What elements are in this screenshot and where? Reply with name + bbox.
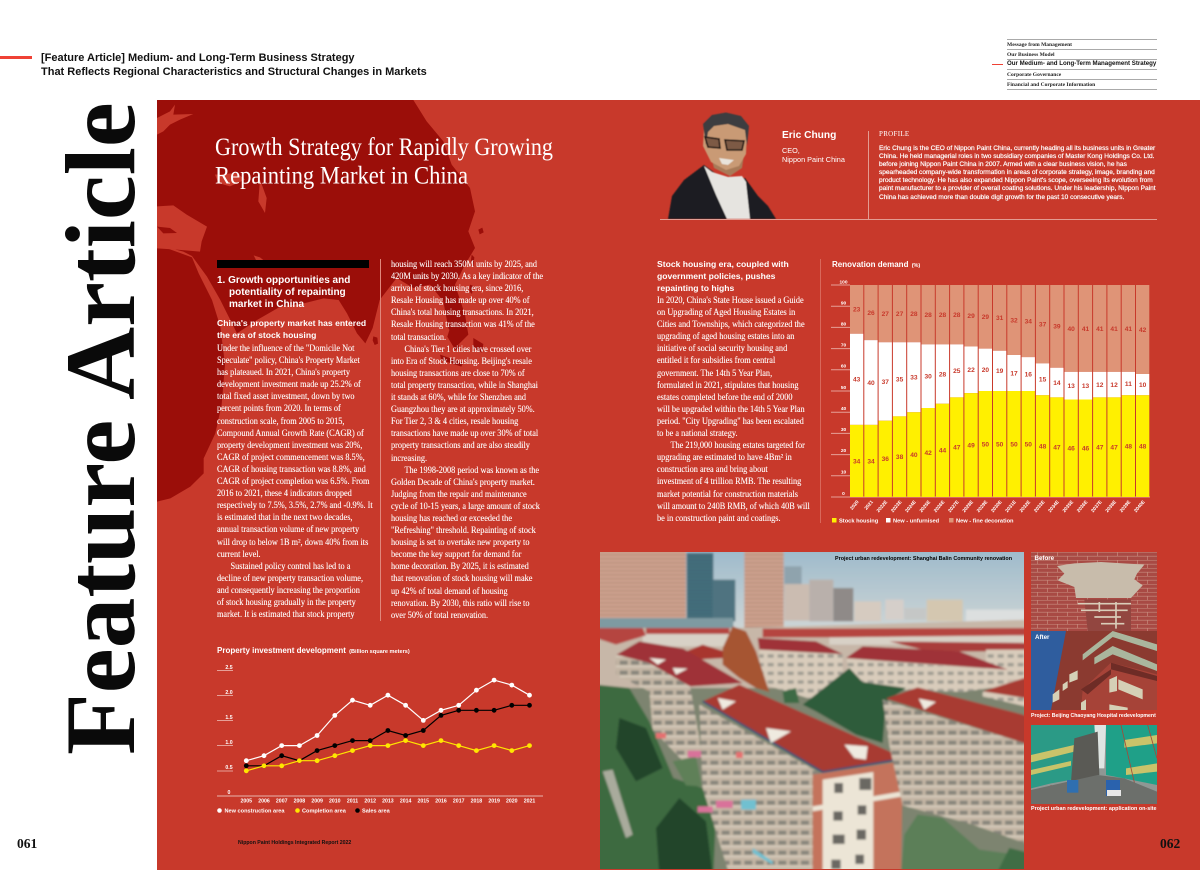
text block: column two: cycle of 10-15 years, a large amount of stock xyxy=(391,501,540,511)
bars: stock housing xyxy=(850,391,1149,497)
series: sales area xyxy=(246,705,530,766)
line chart: property investment development: 2006 xyxy=(258,798,270,804)
line chart: property investment development: 2012 xyxy=(364,798,376,804)
stacked bar chart: renovation demand: 41 xyxy=(1125,326,1132,333)
text block: column one: Speculate" policy, China's Property Market xyxy=(217,355,360,365)
profile biography: spearheaded company-wide transformation in areas of corporate strategy, image, branding and xyxy=(879,169,1155,176)
stacked bar chart: renovation demand: 2033E xyxy=(1033,499,1047,514)
text block: column one: percent points from 2020. In terms of xyxy=(217,403,341,413)
subheading: government policies: Stock housing era, coupled with xyxy=(657,259,789,269)
column divider xyxy=(820,259,821,523)
line chart: property investment development: 2019 xyxy=(488,798,500,804)
stacked bar chart: renovation demand: 2037E xyxy=(1090,499,1104,514)
stacked bar chart: renovation demand: 46 xyxy=(1082,446,1089,452)
stacked bar chart: renovation demand: 17 xyxy=(1010,370,1018,377)
stacked bar chart: renovation demand: 30 xyxy=(841,427,846,433)
line chart: property investment development: 2007 xyxy=(276,798,288,804)
stacked bar chart: renovation demand: 40 xyxy=(867,380,875,387)
text block: column two: housing has reached or exceeded the xyxy=(391,513,512,523)
page header title: [Feature Article] Medium- and Long-Term Business Strategy xyxy=(41,52,355,64)
photo caption: Shanghai Balin: Project urban redevelopment: Shanghai Balin Community renovation xyxy=(835,556,1012,562)
text block: column three: will be upgraded within the 14th 5 Year Plan xyxy=(657,404,805,414)
stacked bar chart: renovation demand: 2020 xyxy=(849,499,861,511)
line chart: property investment development: 2010 xyxy=(329,798,341,804)
text block: column three: be in construction paint and coatings. xyxy=(657,513,781,523)
text block: column two: it stands at 60%, while for Shenzhen and xyxy=(391,392,526,402)
article title xyxy=(215,134,553,190)
text block: column two: housing will reach 350M units by 2025, and xyxy=(391,259,537,269)
stacked bar chart: renovation demand: 48 xyxy=(1125,443,1132,450)
stacked bar chart: renovation demand: 2035E xyxy=(1062,499,1076,514)
section heading: market in China xyxy=(229,298,304,310)
stacked bar chart: renovation demand: 49 xyxy=(967,442,975,449)
text block: column one: CAGR of project completion was 6.5%. From xyxy=(217,476,369,486)
line chart: property investment development xyxy=(217,646,543,814)
stacked bar chart: renovation demand: 40 xyxy=(910,452,918,459)
bars: new - unfurnished xyxy=(850,334,1149,425)
stacked bar chart: renovation demand: 28 xyxy=(939,312,946,319)
stacked bar chart: renovation demand: 34 xyxy=(853,458,861,465)
stacked bar chart: renovation demand: 34 xyxy=(1025,318,1032,325)
text block: column two: housing transactions are close to 70% of xyxy=(391,368,525,378)
stacked bar chart: renovation demand: 37 xyxy=(1039,322,1047,328)
text block: column two: property transactions and are also steadily xyxy=(391,440,530,450)
stacked bar chart: renovation demand: 23 xyxy=(853,307,861,314)
line chart: property investment development: 2017 xyxy=(453,798,465,804)
stacked bar chart: renovation demand: 2027E xyxy=(947,499,961,514)
text block: column one: property development investment was 20%, xyxy=(217,440,362,450)
page header title: That Reflects Regional Characteristics and Structural Changes in Markets xyxy=(41,66,427,78)
section navigation: Our Medium- and Long-Term Management Strategy xyxy=(1007,60,1156,67)
stacked bar chart: renovation demand: Renovation demand (%) xyxy=(832,260,920,269)
text block: column two: "Refreshing" threshold. Repainting of stock xyxy=(391,525,536,535)
caption: hospital redevelopment: Project: Beijing Chaoyang Hospital redevelopment xyxy=(1031,712,1156,718)
stacked bar chart: renovation demand: 0 xyxy=(842,491,845,497)
stacked bar chart: renovation demand: 2032E xyxy=(1019,499,1033,514)
black accent bar xyxy=(217,260,369,268)
series: new construction area xyxy=(246,680,530,761)
text block: column one: of stock housing gradually in the property xyxy=(217,597,356,607)
stacked bar chart: renovation demand xyxy=(831,260,1150,524)
chart legend: Completion area xyxy=(302,808,347,814)
page header title xyxy=(41,52,427,78)
stacked bar chart: renovation demand: 13 xyxy=(1068,383,1075,390)
line chart: property investment development: 2005 xyxy=(241,798,252,804)
stacked bar chart: renovation demand: 13 xyxy=(1082,383,1089,390)
stacked bar chart: renovation demand: 50 xyxy=(841,385,846,391)
page number left: 061 xyxy=(17,836,37,851)
text block: column one: has plateaued. In 2021, China's property xyxy=(217,367,350,377)
section navigation: Our Business Model xyxy=(1007,52,1055,58)
stacked bar chart: renovation demand: 47 xyxy=(1096,444,1104,452)
text block: column two: into Era of Stock Housing. Beijing's resale xyxy=(391,356,532,366)
stacked bar chart: renovation demand: 44 xyxy=(939,448,946,455)
text block: column two: up 42% of total demand of housing xyxy=(391,586,508,596)
person role: CEO, xyxy=(782,146,800,154)
text block: column one: CAGR of project commencement was 8.5%, xyxy=(217,452,365,462)
stacked bar chart: renovation demand: 2038E xyxy=(1104,499,1118,514)
text block: column two: transactions have made up over 30% of total xyxy=(391,428,538,438)
stacked bar chart: renovation demand: 47 xyxy=(1110,444,1118,452)
chart legend xyxy=(832,518,1014,524)
panel: red article background xyxy=(157,100,1200,870)
photo: before repaint xyxy=(1031,552,1157,631)
footer: report name: Nippon Paint Holdings Integrated Report 2022 xyxy=(238,840,351,846)
text block: column two xyxy=(390,259,543,620)
stacked bar chart: renovation demand: 80 xyxy=(841,322,846,328)
section heading: potentiality of repainting xyxy=(229,286,346,298)
page number right: 062 xyxy=(1160,836,1180,851)
text block: column three: estates completed before the end of 2000 xyxy=(657,392,792,402)
text block: column three: The 219,000 housing estates targeted for xyxy=(670,440,805,450)
stacked bar chart: renovation demand: 41 xyxy=(1110,326,1118,333)
stacked bar chart: renovation demand: 35 xyxy=(896,377,904,384)
text block: column one: market. It is estimated that stock property xyxy=(217,609,355,619)
stacked bar chart: renovation demand: 30 xyxy=(925,374,932,380)
chart legend: New - fine decoration xyxy=(956,518,1014,524)
subheading: government policies: repainting to highs xyxy=(657,283,734,293)
text block: column one: will drop to below 1B m², down 40% from its xyxy=(217,536,368,546)
text block: column two: China's Tier 1 cities have crossed over xyxy=(404,344,531,354)
stacked bar chart: renovation demand: 2030E xyxy=(990,499,1004,514)
line chart: property investment development: 2021 xyxy=(524,798,535,804)
stacked bar chart: renovation demand: 2031E xyxy=(1004,499,1018,514)
profile name block xyxy=(782,130,845,164)
profile biography: paint manufacturer to a provider of overall coating solutions. Under his leadership, Nippon Paint xyxy=(879,185,1156,192)
stacked bar chart: renovation demand: 2026E xyxy=(933,499,947,514)
chart legend xyxy=(217,808,391,814)
profile text xyxy=(879,130,1156,201)
stacked bar chart: renovation demand: 2024E xyxy=(904,499,918,514)
section navigation: Financial and Corporate Information xyxy=(1007,82,1095,88)
stacked bar chart: renovation demand: 10 xyxy=(841,470,846,476)
text block: column one xyxy=(216,343,373,619)
stacked bar chart: renovation demand: 28 xyxy=(925,312,932,319)
stacked bar chart: renovation demand: 2034E xyxy=(1047,499,1061,514)
photo: Shanghai Balin Community renovation xyxy=(600,552,1024,869)
text block: column three: In 2020, China's State House issued a Guide xyxy=(657,295,804,305)
line chart: property investment development: 2020 xyxy=(506,798,518,804)
column divider xyxy=(380,259,381,621)
text block: column one: development investment made up 25.2% of xyxy=(217,379,361,389)
stacked bar chart: renovation demand: 2039E xyxy=(1119,499,1133,514)
stacked bar chart: renovation demand: 40 xyxy=(841,406,846,412)
line chart: property investment development: 0.5 xyxy=(225,765,233,771)
stacked bar chart: renovation demand: 32 xyxy=(1010,317,1018,324)
stacked bar chart: renovation demand: 33 xyxy=(910,374,918,382)
text block: column two: total transaction. xyxy=(391,332,446,342)
section heading: 1. Growth opportunities and xyxy=(217,274,350,286)
stacked bar chart: renovation demand: 41 xyxy=(1096,326,1104,333)
subheading: government policies xyxy=(657,259,789,293)
stacked bar chart: renovation demand: 42 xyxy=(1139,327,1147,334)
background world map xyxy=(157,100,484,502)
caption: application on-site: Project urban redevelopment: application on-site xyxy=(1031,806,1157,812)
profile divider xyxy=(868,131,869,219)
stacked bar chart: renovation demand: 16 xyxy=(1025,371,1032,378)
text block: column two: total property transaction, while in Shanghai xyxy=(391,380,538,390)
series: completion area xyxy=(246,741,530,771)
subheading: stock housing era: the era of stock housing xyxy=(217,330,316,340)
chart legend: New construction area xyxy=(224,808,285,814)
text block: column two: Golden Decade of China's property market. xyxy=(391,477,535,487)
text block: column two: For Tier 2, 3 & 4 cities, resale housing xyxy=(391,416,518,426)
stacked bar chart: renovation demand: 90 xyxy=(841,300,846,306)
text block: column two: renovation. By 2030, this ratio will rise to xyxy=(391,598,529,608)
line chart: property investment development: 2015 xyxy=(418,798,429,804)
text block: column two: arrival of stock housing era, since 2016, xyxy=(391,283,523,293)
text block: column three: Cities and Townships, which categorized the xyxy=(657,319,805,329)
text block: column two: Resale Housing transaction was 41% of the xyxy=(391,319,535,329)
text block: column one: 2016 to 2021, these 4 indicators dropped xyxy=(217,488,352,498)
text block: column two: Judging from the repair and maintenance xyxy=(391,489,527,499)
line chart: property investment development: 2018 xyxy=(471,798,482,804)
chart legend: New - unfurnised xyxy=(893,518,940,524)
person name: Eric Chung xyxy=(782,130,836,141)
profile biography: China has achieved more than double digit growth for the past 10 consecutive years. xyxy=(879,194,1124,201)
text block: column three: on Upgrading of Aged Housing Estates in xyxy=(657,307,795,317)
stacked bar chart: renovation demand: 43 xyxy=(853,377,861,384)
stacked bar chart: renovation demand: 36 xyxy=(882,456,889,463)
stacked bar chart: renovation demand: 2029E xyxy=(976,499,990,514)
text block: column one: and consequently increasing the proportion xyxy=(217,585,360,595)
stacked bar chart: renovation demand: 50 xyxy=(996,441,1004,448)
stacked bar chart: renovation demand: 2025E xyxy=(919,499,933,514)
stacked bar chart: renovation demand: 31 xyxy=(996,315,1004,322)
red section marker line xyxy=(0,56,32,58)
text block: column one: annual transaction volume of new property xyxy=(217,524,359,534)
subheading: stock housing era xyxy=(217,318,366,340)
portrait: Eric Chung xyxy=(667,112,776,219)
stacked bar chart: renovation demand: 47 xyxy=(1053,444,1061,452)
text block: column three: government. The 14th 5 Year Plan, xyxy=(657,368,772,378)
text block: column two: Guangzhou they are at approximately 50%. xyxy=(391,404,535,414)
profile biography: Eric Chung is the CEO of Nippon Paint China, currently heading all its business units in Greater xyxy=(879,145,1155,152)
text block: column two: that renovation of stock housing will make xyxy=(391,573,532,583)
line chart: property investment development: 2013 xyxy=(382,798,394,804)
stacked bar chart: renovation demand: 34 xyxy=(867,458,875,465)
profile heading: PROFILE xyxy=(879,130,910,138)
stacked bar chart: renovation demand: 42 xyxy=(925,450,932,457)
stacked bar chart: renovation demand: 46 xyxy=(1068,446,1075,452)
text block: column two: China's total housing transactions. In 2021, xyxy=(391,307,534,317)
stacked bar chart: renovation demand: 15 xyxy=(1039,377,1047,384)
text block: column two: housing is set to overtake new property to xyxy=(391,537,529,547)
profile biography: before joining Nippon Paint China in 2007. Armed with a clear business vision, he has xyxy=(879,161,1127,168)
text block: column three xyxy=(656,295,810,523)
line chart: property investment development: 1.5 xyxy=(225,715,233,721)
section navigation: Message from Management xyxy=(1007,42,1072,48)
profile bottom rule xyxy=(660,219,1157,220)
text block: column three: upgrading are estimated to have 4Bm² in xyxy=(657,452,792,462)
photo: after repaint xyxy=(1031,631,1157,710)
line chart: property investment development: 2016 xyxy=(435,798,447,804)
text block: column three: formulated in 2021, stipulates that housing xyxy=(657,380,798,390)
label: before: Before xyxy=(1034,555,1054,562)
text block: column three: period. "City Upgrading" has been escalated xyxy=(657,416,804,426)
line chart: property investment development: 2014 xyxy=(400,798,411,804)
stacked bar chart: renovation demand: 50 xyxy=(1025,441,1032,448)
label: after: After xyxy=(1035,634,1049,641)
stacked bar chart: renovation demand: 29 xyxy=(967,313,975,320)
photo: application on-site xyxy=(1031,725,1157,804)
text block: column one: CAGR of housing transaction was 8.8%, and xyxy=(217,464,366,474)
text block: column three: upgrading of aged housing estates into an xyxy=(657,331,794,341)
text block: column three: construction area and bring about xyxy=(657,464,768,474)
stacked bar chart: renovation demand: 70 xyxy=(841,342,846,348)
stacked bar chart: renovation demand: 29 xyxy=(982,314,989,321)
stacked bar chart: renovation demand: 27 xyxy=(882,311,889,318)
article title: Repainting Market in China xyxy=(215,162,468,190)
stacked bar chart: renovation demand: 47 xyxy=(953,444,961,452)
stacked bar chart: renovation demand: 27 xyxy=(896,311,904,318)
subheading: government policies: government policies, pushes xyxy=(657,271,775,281)
text block: column one: Sustained policy control has led to a xyxy=(230,561,350,571)
stacked bar chart: renovation demand: 2040E xyxy=(1133,499,1147,514)
section heading xyxy=(217,274,350,310)
text block: column two: The 1998-2008 period was known as the xyxy=(404,465,539,475)
stacked bar chart: renovation demand: 60 xyxy=(841,364,846,370)
section navigation: Corporate Governance xyxy=(1007,72,1061,78)
text block: column two: increasing. xyxy=(391,452,427,462)
stacked bar chart: renovation demand: 10 xyxy=(1139,382,1147,389)
stacked bar chart: renovation demand: 12 xyxy=(1110,382,1118,389)
stacked bar chart: renovation demand: 38 xyxy=(896,454,904,461)
text block: column two: Resale Housing has made up over 40% of xyxy=(391,295,529,305)
stacked bar chart: renovation demand: 14 xyxy=(1053,380,1061,387)
stacked bar chart: renovation demand: 22 xyxy=(967,367,975,374)
stacked bar chart: renovation demand: 2023E xyxy=(890,499,904,514)
section navigation xyxy=(992,39,1157,90)
text block: column one: decline of new property transaction volume, xyxy=(217,573,363,583)
stacked bar chart: renovation demand: 11 xyxy=(1125,381,1132,388)
stacked bar chart: renovation demand: 2021 xyxy=(863,499,875,511)
profile biography: product technology. He has also expanded Nippon Paint's scope, overseeing its evolution from xyxy=(879,177,1153,184)
stacked bar chart: renovation demand: 19 xyxy=(996,368,1004,375)
stacked bar chart: renovation demand: 48 xyxy=(1139,443,1147,450)
stacked bar chart: renovation demand: 50 xyxy=(982,441,989,448)
line chart: property investment development: 1.0 xyxy=(225,740,233,746)
person role: Nippon Paint China xyxy=(782,155,845,164)
text block: column three: to be a national strategy. xyxy=(657,428,738,438)
stacked bar chart: renovation demand: 37 xyxy=(882,379,889,386)
stacked bar chart: renovation demand: 48 xyxy=(1039,443,1047,450)
text block: column one: Under the influence of the "Domicile Not xyxy=(217,343,354,353)
stacked bar chart: renovation demand: 28 xyxy=(910,311,918,318)
text block: column two: 420M units by 2030. As a key indicator of the xyxy=(391,271,543,281)
profile biography: China. He held managerial roles in two subsidiary companies of Master Kong Holdings Co. Ltd. xyxy=(879,153,1154,160)
text block: column one: Compound Annual Growth Rate (CAGR) of xyxy=(217,428,364,438)
text block: column two: become the key support for demand for xyxy=(391,549,521,559)
bars: new - fine decoration xyxy=(850,285,1149,374)
stacked bar chart: renovation demand: 39 xyxy=(1053,324,1061,331)
stacked bar chart: renovation demand: 20 xyxy=(982,367,989,374)
stacked bar chart: renovation demand: 40 xyxy=(1068,326,1075,333)
text block: column one: current level. xyxy=(217,549,261,559)
stacked bar chart: renovation demand: 2028E xyxy=(961,499,975,514)
text block: column two: over 50% of total renovation. xyxy=(391,610,488,620)
subheading: stock housing era: China's property market has entered xyxy=(217,318,366,328)
stacked bar chart: renovation demand: 25 xyxy=(953,368,961,375)
stacked bar chart: renovation demand: 2022E xyxy=(876,499,890,514)
text block: column one: total fixed asset investment, down by two xyxy=(217,391,355,401)
line chart: property investment development: 0 xyxy=(228,790,231,796)
stacked bar chart: renovation demand: 50 xyxy=(1010,441,1018,448)
chart legend: Stock housing xyxy=(839,518,879,524)
line chart: property investment development: 2.0 xyxy=(225,690,233,696)
stacked bar chart: renovation demand: 41 xyxy=(1082,326,1089,333)
line chart: property investment development: Property investment development (Billion square meters) xyxy=(217,646,410,655)
stacked bar chart: renovation demand: 28 xyxy=(953,312,961,319)
line chart: property investment development: 2009 xyxy=(311,798,323,804)
text block: column one: respectively to 7.5%, 3.5%, 2.7% and -0.9%. It xyxy=(217,500,373,510)
profile biography xyxy=(879,145,1156,201)
line chart: property investment development: 2011 xyxy=(347,798,358,804)
text block: column three: entitled it for subsidies from central xyxy=(657,355,775,365)
text block: column three: market potential for construction materials xyxy=(657,488,798,498)
chart legend: Sales area xyxy=(362,808,391,814)
stacked bar chart: renovation demand: 28 xyxy=(939,371,946,378)
text block: column two: home decoration. By 2025, it is estimated xyxy=(391,561,529,571)
text block: column one: is estimated that in the next two decades, xyxy=(217,512,352,522)
line chart: property investment development: 2.5 xyxy=(225,665,233,671)
line chart: property investment development: 2008 xyxy=(294,798,305,804)
person role xyxy=(782,146,845,164)
stacked bar chart: renovation demand: 2036E xyxy=(1076,499,1090,514)
stacked bar chart: renovation demand: 20 xyxy=(841,448,846,454)
stacked bar chart: renovation demand: 12 xyxy=(1096,382,1104,389)
text block: column three: initiative of social security housing and xyxy=(657,343,787,353)
text block: column three: investment of 4 trillion RMB. The resulting xyxy=(657,476,801,486)
stacked bar chart: renovation demand: 100 xyxy=(839,280,848,286)
text block: column one: construction scale, from 2005 to 2015, xyxy=(217,416,344,426)
stacked bar chart: renovation demand: 26 xyxy=(867,310,875,317)
text block: column three: will amount to 240B RMB, of which 40B will xyxy=(657,501,810,511)
